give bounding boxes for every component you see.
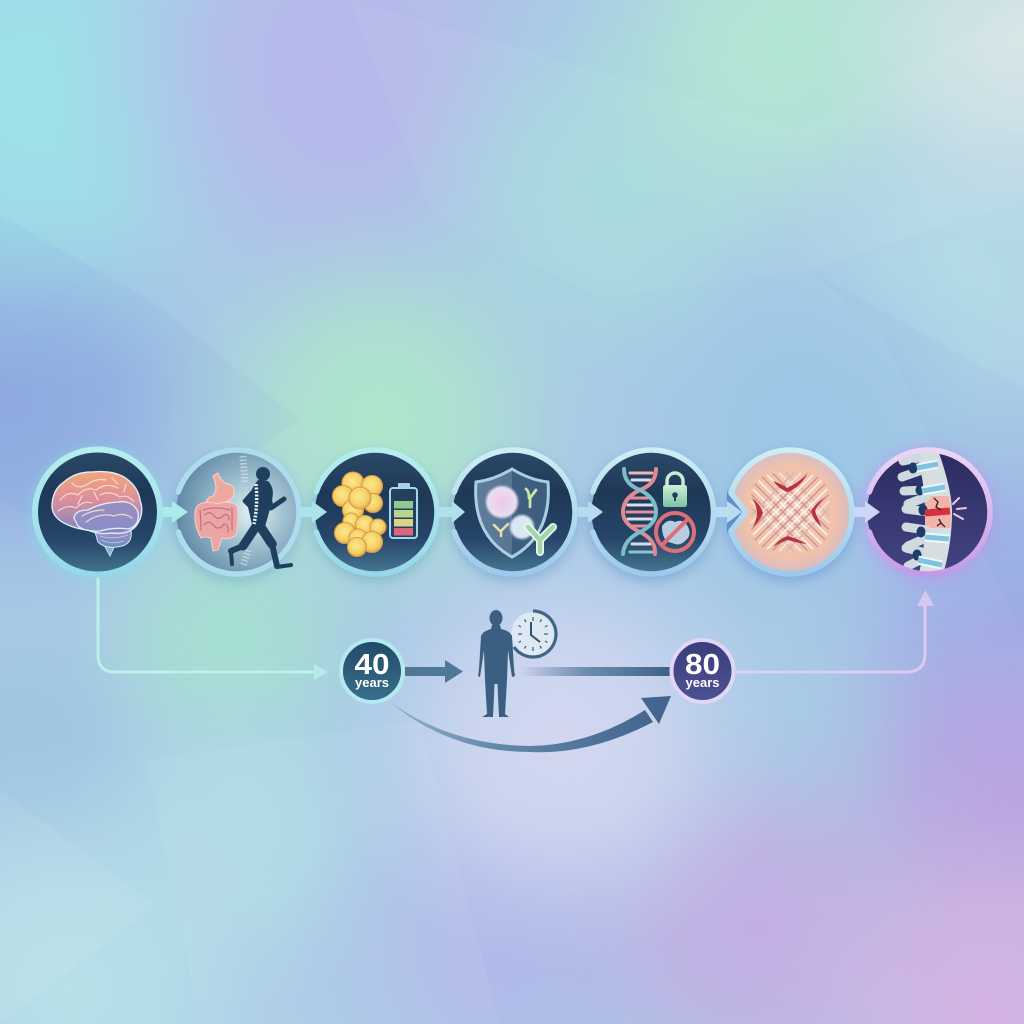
icon: stomach and intestines: [195, 473, 238, 551]
step 3: fat cells and battery circle: [315, 450, 437, 574]
icon: crossed muscle fibres: [750, 472, 830, 552]
arrow notch: [727, 491, 746, 533]
badge: 80 years: 80: [685, 649, 720, 681]
arrow 3 to 4: [438, 501, 465, 523]
icon: running figure: [231, 467, 291, 567]
step 4: immune shield circle: [453, 450, 575, 574]
icon: battery: [390, 483, 417, 538]
badge: 80 years: years: [686, 675, 720, 690]
soft shadow glow behind the circle row: [29, 445, 997, 583]
icon: clock: [511, 611, 556, 657]
badge: 40 years: 40: [354, 649, 390, 681]
icon: fat cells: [332, 472, 386, 556]
step 1: brain circle: [35, 450, 160, 574]
arrow 4 to 5: [578, 501, 603, 523]
step 7: spine fracture circle: [867, 450, 990, 578]
badge: 40 years: [341, 640, 403, 702]
timeline connector: left path to 40 years: [98, 578, 328, 680]
icon: ban sign over cell: [656, 513, 694, 551]
step 5: DNA, lock and ban circle: [592, 450, 713, 574]
timeline connector: right path up to spine: [736, 590, 934, 672]
icon: shield: [476, 469, 548, 557]
curved arrow from 40 to 80 years: [390, 696, 671, 752]
icon: human figure: [478, 610, 515, 717]
badge: 80 years: [672, 640, 734, 702]
icon: faint spine: [243, 456, 248, 566]
icon: red tension marks: [752, 475, 825, 547]
arrow 1 to 2: [163, 501, 188, 523]
arrow 2 to 3: [300, 501, 327, 523]
step 6: muscle tissue circle: [727, 450, 852, 574]
icon: brain: [52, 472, 142, 556]
icon: immune cells and antibodies: [486, 486, 553, 552]
fading bar from figure to 80 years: [520, 667, 670, 676]
badge: 40 years: years: [355, 675, 389, 690]
step 2: digestion and running circle: [176, 450, 299, 574]
icon: DNA helix: [623, 469, 656, 554]
arrow 6 to 7: [854, 501, 880, 523]
arrow from 40 years to figure: [405, 660, 463, 683]
icon: padlock: [663, 473, 687, 507]
arrow 5 to 6: [716, 501, 742, 523]
icon: spine with fracture: [902, 450, 966, 578]
